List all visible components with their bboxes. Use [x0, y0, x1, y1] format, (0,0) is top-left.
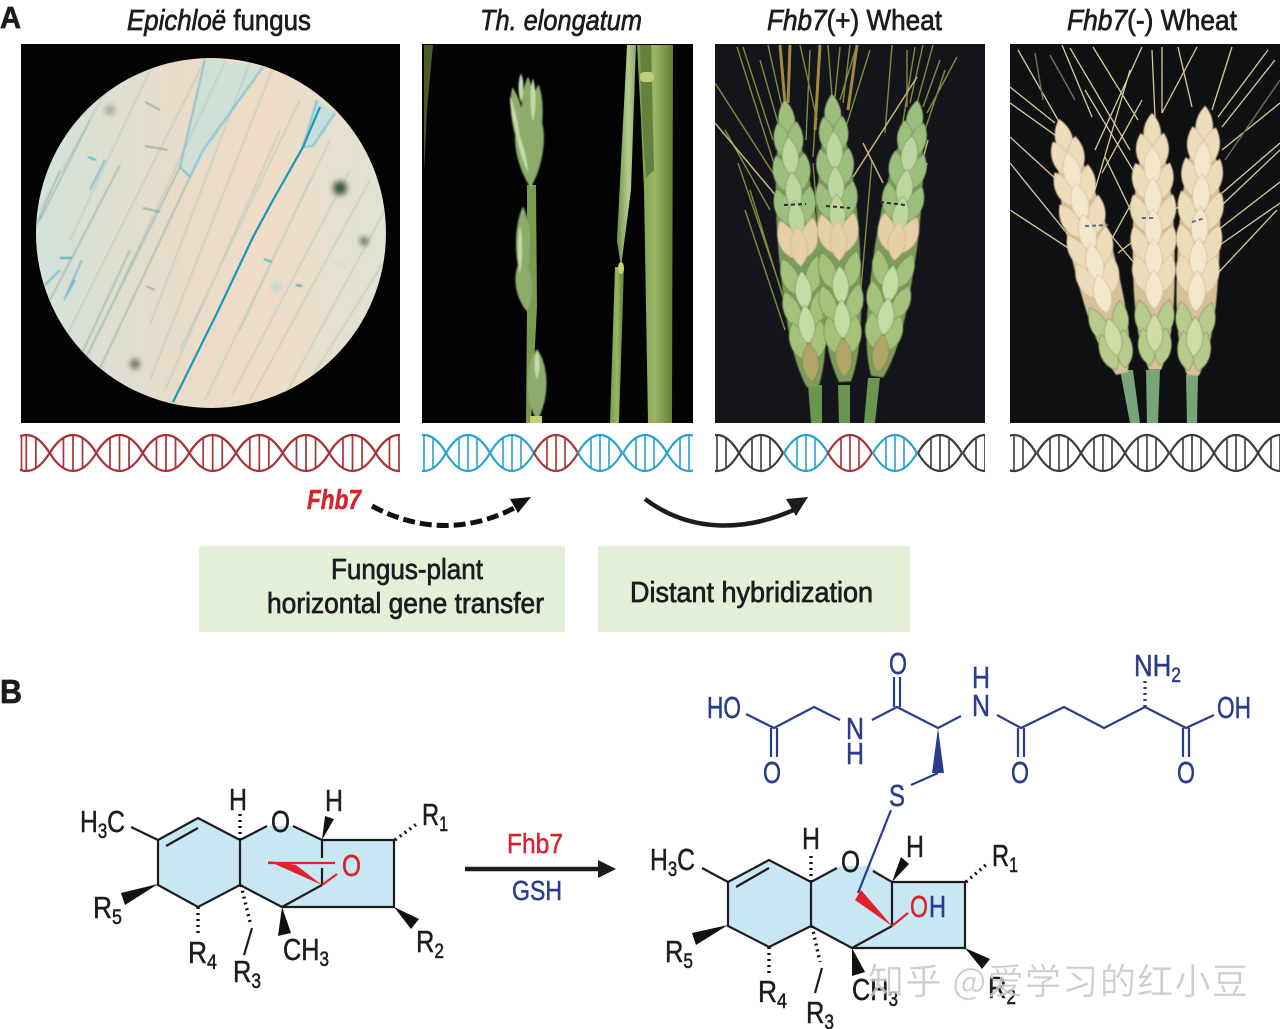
panel: Th. elongatum photo	[422, 44, 693, 423]
molecule: trichothecene substrate: R	[93, 890, 115, 925]
stems	[808, 378, 880, 423]
molecule: glutathione adduct: H	[802, 821, 820, 856]
molecule: trichothecene substrate	[80, 782, 448, 993]
awns	[715, 45, 957, 330]
gene label Fhb7: Fhb7	[307, 484, 362, 515]
molecule: glutathione adduct: R	[992, 838, 1014, 873]
epoxide in red: O	[342, 848, 361, 883]
molecule: trichothecene substrate: 3	[251, 970, 261, 993]
molecule: trichothecene substrate: R	[422, 797, 444, 832]
glutathione chain in blue	[707, 646, 1251, 893]
reaction arrow with Fhb7 and GSH	[465, 828, 616, 906]
panel: Fhb7(+) wheat photo	[715, 44, 985, 423]
glutathione chain in blue: H	[972, 660, 990, 695]
glutathione chain in blue: O	[889, 646, 907, 681]
heading: Epichloë fungus: Epichloë fungus	[127, 5, 311, 37]
stems	[1120, 370, 1198, 423]
watermark: 知乎 @爱学习的红小豆	[868, 953, 1248, 1005]
reaction arrow with Fhb7 and GSH: Fhb7	[507, 828, 563, 859]
molecule: glutathione adduct: H	[906, 829, 924, 864]
molecule: trichothecene substrate: CH	[283, 932, 328, 967]
panel: Epichloë microscope image	[21, 44, 400, 423]
glutathione chain in blue: S	[889, 778, 905, 813]
stained blue hypha	[173, 107, 320, 402]
molecule: glutathione adduct: O	[910, 889, 928, 924]
reaction arrow with Fhb7 and GSH: GSH	[512, 875, 562, 906]
molecule: trichothecene substrate: O	[271, 804, 290, 839]
glutathione chain in blue: O	[1011, 755, 1029, 790]
callout: fungus-plant transfer: Fungus-plant	[331, 554, 483, 586]
molecule: glutathione adduct: C	[677, 842, 695, 877]
molecule: glutathione adduct: CH	[852, 972, 897, 1007]
panel: Fhb7(-) wheat photo	[1010, 44, 1280, 423]
molecule: glutathione adduct: H	[650, 842, 672, 877]
glutathione chain in blue: NH	[1134, 648, 1179, 683]
molecule: trichothecene substrate: 3	[98, 820, 107, 843]
molecule: glutathione adduct: R	[758, 974, 780, 1009]
callout: fungus-plant transfer	[199, 546, 565, 632]
awns	[1010, 45, 1280, 273]
molecule: trichothecene substrate: 5	[112, 906, 122, 929]
leaf blade	[617, 45, 636, 267]
callout: fungus-plant transfer: horizontal gene transfer	[267, 588, 544, 620]
heading: Fhb7(-) Wheat: Fhb7(-) Wheat	[1067, 5, 1237, 37]
glutathione chain in blue: HO	[707, 690, 741, 725]
molecule: glutathione adduct: R	[988, 970, 1010, 1005]
molecule: glutathione adduct: 4	[777, 990, 787, 1013]
glutathione chain in blue: O	[1177, 755, 1195, 790]
epoxide in red	[268, 848, 361, 885]
molecule: glutathione adduct: 2	[1006, 986, 1016, 1009]
molecule: trichothecene substrate: H	[229, 782, 247, 817]
molecule: trichothecene substrate: R	[416, 924, 438, 959]
callout: distant hybridization: Distant hybridization	[630, 577, 873, 609]
molecule: glutathione adduct: 3	[668, 858, 677, 881]
callout: distant hybridization	[598, 546, 910, 632]
molecule: glutathione adduct: 5	[683, 950, 693, 973]
molecule: trichothecene substrate: 1	[439, 813, 448, 836]
molecule: glutathione adduct: R	[806, 995, 828, 1029]
glutathione chain in blue: H	[846, 736, 864, 771]
glutathione chain in blue: N	[846, 711, 864, 746]
molecule: glutathione adduct: 3	[888, 988, 898, 1011]
DNA helix: Th. elongatum with Fhb7	[402, 435, 711, 471]
molecule: trichothecene substrate: 3	[319, 948, 329, 971]
molecule: trichothecene substrate: 2	[434, 940, 444, 963]
spike stalk	[526, 185, 537, 423]
molecule: glutathione adduct	[650, 646, 1251, 1029]
thick stem	[637, 45, 673, 423]
molecule: glutathione adduct: R	[665, 934, 687, 969]
heading: Fhb7(+) Wheat: Fhb7(+) Wheat	[767, 5, 942, 37]
molecule: trichothecene substrate: 4	[207, 951, 217, 974]
molecule: glutathione adduct: 1	[1009, 854, 1018, 877]
arrow: hybridization	[645, 497, 808, 526]
panel letter B: B	[0, 673, 22, 710]
DNA helix: Epichloë	[3, 435, 422, 471]
glutathione chain in blue: N	[972, 688, 990, 723]
glutathione chain in blue: O	[763, 755, 781, 790]
molecule: trichothecene substrate: H	[80, 804, 102, 839]
molecule: glutathione adduct: H	[929, 889, 946, 924]
glutathione chain in blue: 2	[1171, 664, 1181, 687]
heading: Th. elongatum: Th. elongatum	[480, 5, 642, 37]
arrow: dashed gene transfer	[372, 497, 531, 526]
molecule: trichothecene substrate: C	[107, 804, 125, 839]
molecule: trichothecene substrate: R	[233, 954, 255, 989]
DNA helix: Fhb7(-) wheat	[992, 435, 1280, 471]
molecule: trichothecene substrate: H	[325, 783, 343, 818]
wheat ears	[1050, 118, 1134, 376]
molecule: glutathione adduct: O	[841, 844, 860, 879]
glutathione chain in blue: OH	[1217, 690, 1251, 725]
DNA helix: Fhb7(+) wheat	[695, 435, 1007, 471]
wheat ears	[772, 100, 827, 388]
molecule: trichothecene substrate: R	[188, 935, 210, 970]
panel letter A: A	[0, 0, 21, 35]
